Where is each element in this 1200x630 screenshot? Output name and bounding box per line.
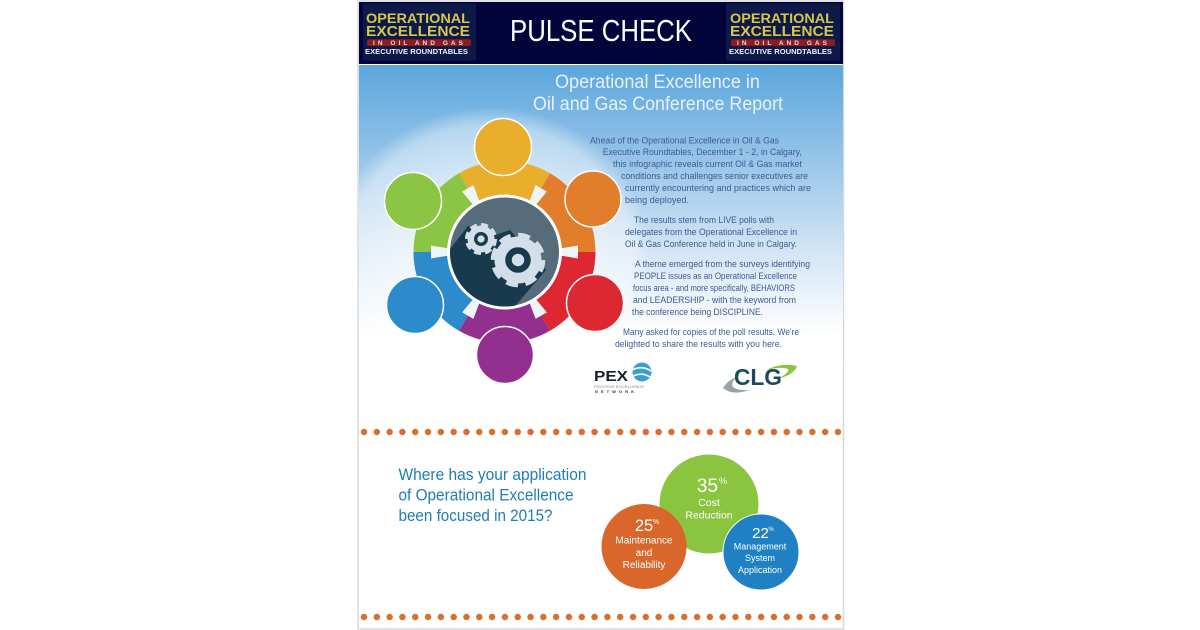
intro text: A theme emerged from the surveys identifying <box>635 259 810 269</box>
bubble: maintenance and reliability 25% <box>602 504 686 589</box>
bubble: maintenance and reliability 25%: Reliability <box>623 560 665 571</box>
center gears disc <box>440 194 562 312</box>
CLG logo: CLG <box>734 364 782 390</box>
CLG logo <box>723 364 797 393</box>
PEX logo: PEX <box>594 368 628 385</box>
survey question <box>398 465 586 525</box>
body: green <box>414 173 476 252</box>
right roundtable logo: EXECUTIVE ROUNDTABLES <box>729 47 832 56</box>
left roundtable logo: IN OIL AND GAS <box>373 40 464 47</box>
intro text: Executive Roundtables, December 1 - 2, in Calgary, <box>603 147 802 157</box>
heading: pulse check: PULSE CHECK <box>510 13 692 48</box>
dotted divider: bottom <box>364 614 838 620</box>
left roundtable logo: EXCELLENCE <box>366 24 470 40</box>
bubble: cost reduction 35%: % <box>719 476 727 486</box>
right roundtable logo: EXCELLENCE <box>730 24 834 40</box>
PEX logo <box>594 362 652 394</box>
small gear <box>467 225 495 253</box>
report title: Operational Excellence in <box>555 72 760 93</box>
intro text: conditions and challenges senior executives are <box>621 171 808 181</box>
head: red <box>566 274 624 332</box>
header banner <box>359 2 843 64</box>
body: orange <box>533 173 596 252</box>
body: blue <box>414 252 476 331</box>
sky background panel <box>359 65 843 365</box>
big gear <box>493 235 543 285</box>
survey question: been focused in 2015? <box>398 506 552 525</box>
bubble: maintenance and reliability 25%: Maintenance <box>615 536 673 546</box>
intro text: this infographic reveals current Oil & Gas market <box>613 159 802 169</box>
left roundtable logo <box>363 4 476 60</box>
intro text: delegates from the Operational Excellence in <box>625 227 797 237</box>
bubble: maintenance and reliability 25%: % <box>653 519 659 526</box>
survey question: Where has your application <box>398 465 586 484</box>
left roundtable logo: EXECUTIVE ROUNDTABLES <box>365 47 468 56</box>
intro text: and LEADERSHIP - with the keyword from <box>633 295 796 305</box>
report title <box>533 72 784 115</box>
intro text: PEOPLE issues as an Operational Excellence <box>634 271 797 281</box>
intro text: Oil & Gas Conference held in June in Calgary. <box>625 239 797 249</box>
head: blue <box>386 276 444 334</box>
intro text <box>590 136 811 349</box>
head: purple <box>476 326 534 384</box>
head: orange <box>565 171 621 227</box>
bubble: cost reduction 35%: 35 <box>697 476 718 497</box>
results bubbles <box>602 454 799 590</box>
head: yellow <box>474 118 532 176</box>
bubble: cost reduction 35%: Cost <box>698 497 720 509</box>
bubble: cost reduction 35%: Reduction <box>685 510 733 522</box>
bubble: maintenance and reliability 25%: 25 <box>635 517 653 535</box>
white notches between bodies <box>431 185 578 319</box>
head: green <box>384 172 442 230</box>
bubble: management system application 22%: Management <box>734 542 787 552</box>
bubble: maintenance and reliability 25%: and <box>636 548 652 559</box>
intro text: delighted to share the results with you here. <box>615 339 782 349</box>
report title: Oil and Gas Conference Report <box>533 94 784 115</box>
intro text: focus area - and more specifically, BEHAVIORS <box>633 283 795 293</box>
right roundtable logo <box>726 4 840 60</box>
bubble: management system application 22%: 22 <box>752 525 769 542</box>
left roundtable logo: OPERATIONAL <box>366 11 470 26</box>
body: red <box>533 252 596 331</box>
intro text: The results stem from LIVE polls with <box>634 215 774 225</box>
intro text: being deployed. <box>625 195 689 205</box>
bubble: management system application 22%: % <box>768 527 774 533</box>
body: yellow <box>459 161 550 203</box>
bubble: management system application 22%: System <box>745 553 775 563</box>
bubble: cost reduction 35% <box>660 454 758 554</box>
PEX logo: NETWORK <box>595 390 634 394</box>
intro text: Many asked for copies of the poll results. We're <box>623 327 799 337</box>
intro text: Ahead of the Operational Excellence in Oil & Gas <box>590 136 779 146</box>
page frame <box>358 1 844 629</box>
bubble: management system application 22%: Application <box>738 565 782 575</box>
right roundtable logo: IN OIL AND GAS <box>737 40 828 47</box>
PEX logo: PROCESS EXCELLENCE <box>594 385 645 389</box>
intro text: currently encountering and practices which are <box>625 183 811 193</box>
intro text: the conference being DISCIPLINE. <box>632 307 763 317</box>
dotted divider: top <box>364 429 838 435</box>
body: purple <box>459 301 550 343</box>
right roundtable logo: OPERATIONAL <box>730 11 834 26</box>
people around table graphic <box>384 118 624 384</box>
bubble: management system application 22% <box>723 514 799 590</box>
survey question: of Operational Excellence <box>398 486 574 504</box>
